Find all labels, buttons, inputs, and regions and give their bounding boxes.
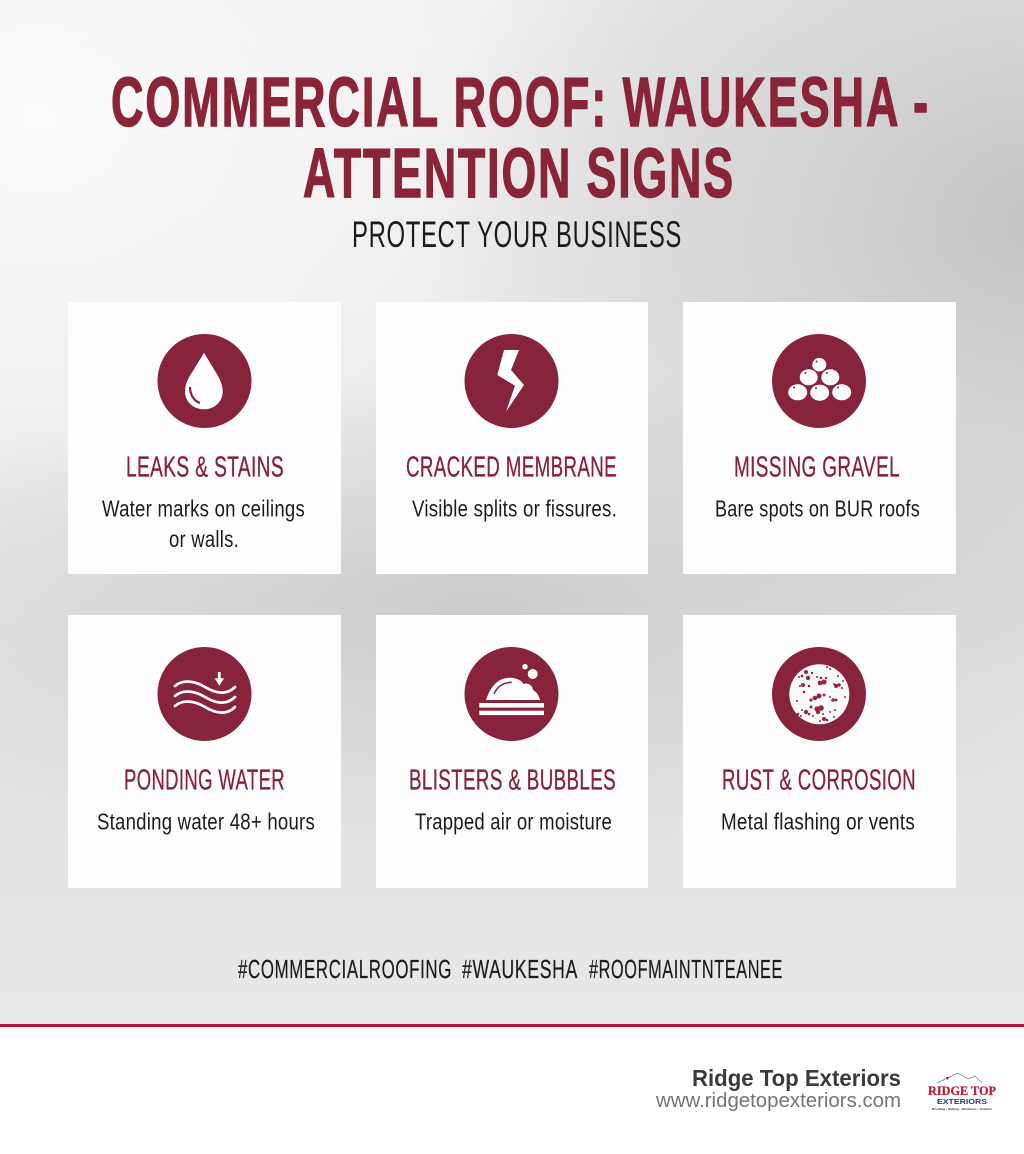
icon: water drop [158, 334, 252, 428]
text: ponding description: Standing water 48+ hours [97, 808, 315, 834]
heading: missing gravel: MISSING GRAVEL [734, 452, 900, 484]
heading: leaks and stains: LEAKS & STAINS [126, 452, 284, 484]
logo [928, 1073, 996, 1111]
footer company text [655, 1065, 901, 1112]
panel: cracked membrane [376, 302, 648, 574]
icon: gravel [772, 334, 866, 428]
icon: water waves [158, 647, 252, 741]
text: rust description: Metal flashing or vents [721, 808, 915, 834]
title: ATTENTION SIGNS [303, 134, 735, 212]
hashtags [238, 954, 783, 984]
heading: cracked membrane: CRACKED MEMBRANE [406, 452, 617, 484]
panel: leaks and stains [68, 302, 341, 574]
footer company text: Ridge Top Exteriors [692, 1065, 901, 1091]
footer band [0, 1024, 1024, 1154]
logo: Roofing • Siding • Windows • Gutters [932, 1107, 992, 1111]
hashtags: #ROOFMAINTNTEANEE [589, 954, 783, 984]
logo: RIDGE TOP [928, 1083, 996, 1098]
title [111, 63, 930, 212]
panel: ponding water [68, 615, 341, 888]
text: leaks description: or walls. [169, 526, 239, 552]
text: leaks description: Water marks on ceilings [102, 496, 305, 522]
text: leaks description [102, 496, 305, 552]
icon: crack [464, 334, 558, 428]
hashtags: #COMMERCIALROOFING [238, 954, 452, 984]
footer company text: www.ridgetopexteriors.com [655, 1090, 901, 1112]
heading: rust and corrosion: RUST & CORROSION [722, 764, 916, 796]
heading: ponding water: PONDING WATER [124, 764, 285, 796]
hashtags: #WAUKESHA [462, 954, 578, 984]
panel: missing gravel [683, 302, 956, 574]
panel: blisters and bubbles [376, 615, 648, 888]
heading: blisters and bubbles: BLISTERS & BUBBLES [409, 764, 616, 796]
text: gravel description: Bare spots on BUR roofs [715, 496, 920, 522]
text: cracked description: Visible splits or fissures. [412, 496, 617, 522]
icon: blister [464, 647, 558, 741]
text: blisters description: Trapped air or moisture [415, 808, 612, 834]
subtitle: PROTECT YOUR BUSINESS [352, 214, 682, 255]
logo: EXTERIORS [937, 1099, 987, 1106]
panel: rust and corrosion [683, 615, 956, 888]
icon: rust [772, 647, 866, 741]
